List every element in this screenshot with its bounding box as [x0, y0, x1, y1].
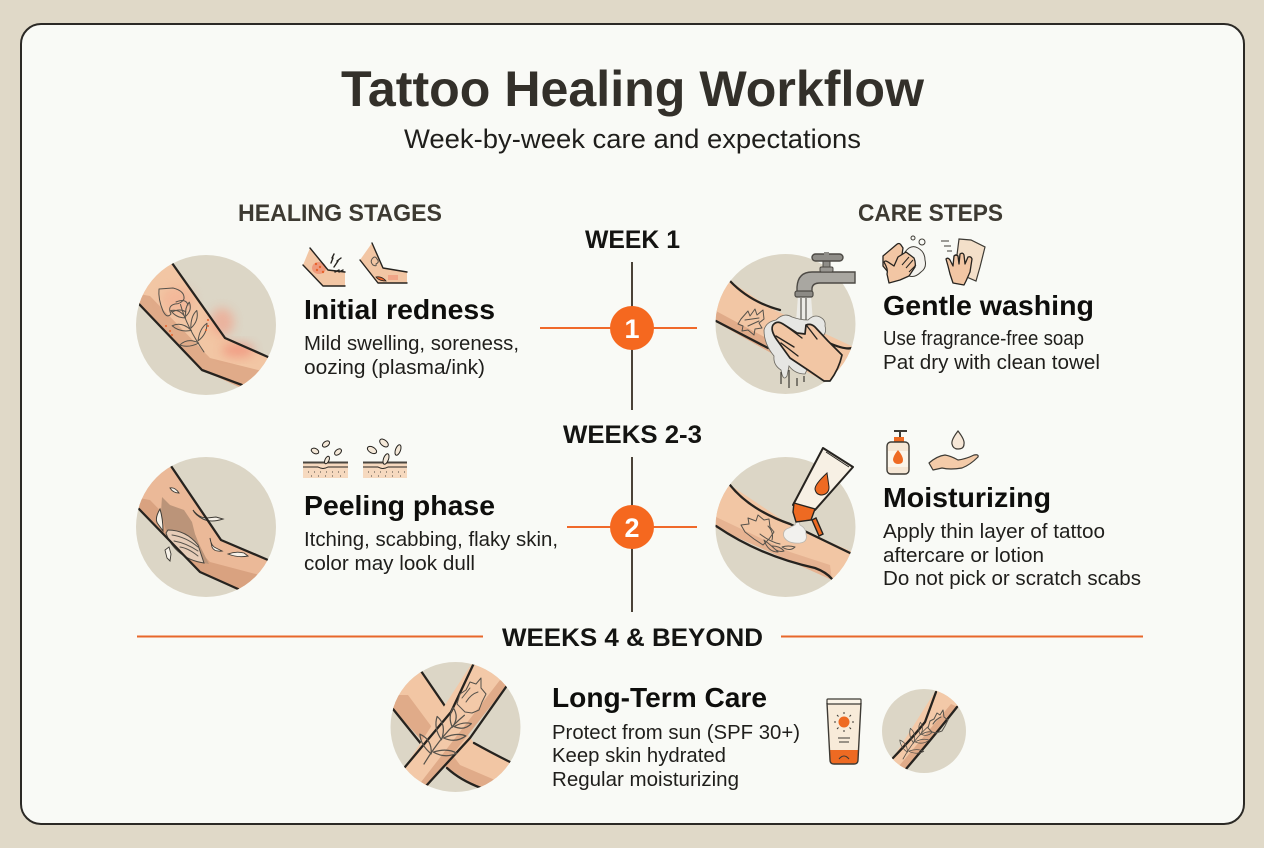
- weeks 2-3 label: WEEKS 2-3: [563, 421, 702, 449]
- tube drop: [815, 473, 829, 495]
- text: moisturizing: Apply thin layer of tattoo: [883, 521, 1105, 543]
- title: Tattoo Healing Workflow: [341, 61, 924, 117]
- timeline lines: [540, 328, 697, 527]
- text: peeling phase: [304, 490, 558, 575]
- text: gentle washing: Pat dry with clean towel: [883, 352, 1100, 374]
- tattoo flower on arm: [741, 515, 795, 552]
- icon: drop over palm: [929, 431, 978, 470]
- illustration: long-term crossed arms: [390, 662, 520, 792]
- illustration: gentle washing: [716, 252, 856, 394]
- text: moisturizing: Do not pick or scratch scabs: [883, 568, 1141, 590]
- heading: healing stages: HEALING STAGES: [238, 200, 442, 227]
- weeks 4 and beyond divider: WEEKS 4 & BEYOND: [502, 624, 763, 652]
- icon: hands lathering: [883, 236, 926, 283]
- step 2 marker: [610, 505, 654, 549]
- step 1 marker: [610, 306, 654, 350]
- text: moisturizing: Moisturizing: [883, 482, 1051, 513]
- step 2 marker: 2: [624, 513, 640, 543]
- text: initial redness: oozing (plasma/ink): [304, 357, 485, 379]
- text: gentle washing: Gentle washing: [883, 290, 1094, 321]
- week 1 label: WEEK 1: [585, 226, 680, 254]
- icon: towel drying: [941, 239, 985, 285]
- faucet: [795, 252, 855, 297]
- icon: sunscreen tube: [827, 699, 861, 764]
- tattoo on washed arm: [738, 309, 764, 335]
- illustration: healed tattoo arm: [882, 689, 966, 775]
- illustration: peeling arm: [136, 457, 276, 597]
- icon: skin layers with larger flakes: [363, 437, 407, 478]
- icon: skin layers with flakes: [303, 440, 348, 478]
- washing hand: [772, 322, 842, 381]
- icon: irritated skin: [303, 248, 345, 286]
- text: initial redness: Mild swelling, soreness,: [304, 333, 519, 355]
- text: long-term care: Regular moisturizing: [552, 769, 739, 791]
- step 1 marker: 1: [624, 314, 640, 344]
- text: peeling phase: Peeling phase: [304, 490, 495, 521]
- text: long-term care: Protect from sun (SPF 30+): [552, 722, 800, 744]
- foam: [764, 315, 826, 378]
- cream tube: [793, 448, 853, 536]
- text: long-term care: Long-Term Care: [552, 682, 767, 713]
- timeline spine: [631, 262, 633, 612]
- subtitle: Week-by-week care and expectations: [404, 124, 861, 154]
- timeline: [540, 226, 702, 612]
- text: moisturizing: [883, 482, 1141, 590]
- text: moisturizing: aftercare or lotion: [883, 545, 1044, 567]
- illustration: initial redness arm: [136, 255, 276, 395]
- text: peeling phase: color may look dull: [304, 553, 475, 575]
- water stream: [796, 296, 813, 322]
- text: initial redness: [304, 294, 519, 379]
- icon: oozing skin: [360, 243, 407, 283]
- text: gentle washing: [883, 290, 1100, 374]
- text: peeling phase: Itching, scabbing, flaky skin,: [304, 529, 558, 551]
- illustration: moisturizing: [716, 447, 856, 597]
- text: gentle washing: Use fragrance-free soap: [883, 328, 1084, 350]
- dripping lines: [781, 370, 804, 388]
- text: long-term care: Keep skin hydrated: [552, 745, 726, 767]
- cream: [784, 519, 806, 543]
- text: initial redness: Initial redness: [304, 294, 495, 325]
- text: long-term care: [552, 682, 800, 791]
- heading: care steps: CARE STEPS: [858, 200, 1003, 227]
- icon: lotion bottle: [887, 431, 909, 474]
